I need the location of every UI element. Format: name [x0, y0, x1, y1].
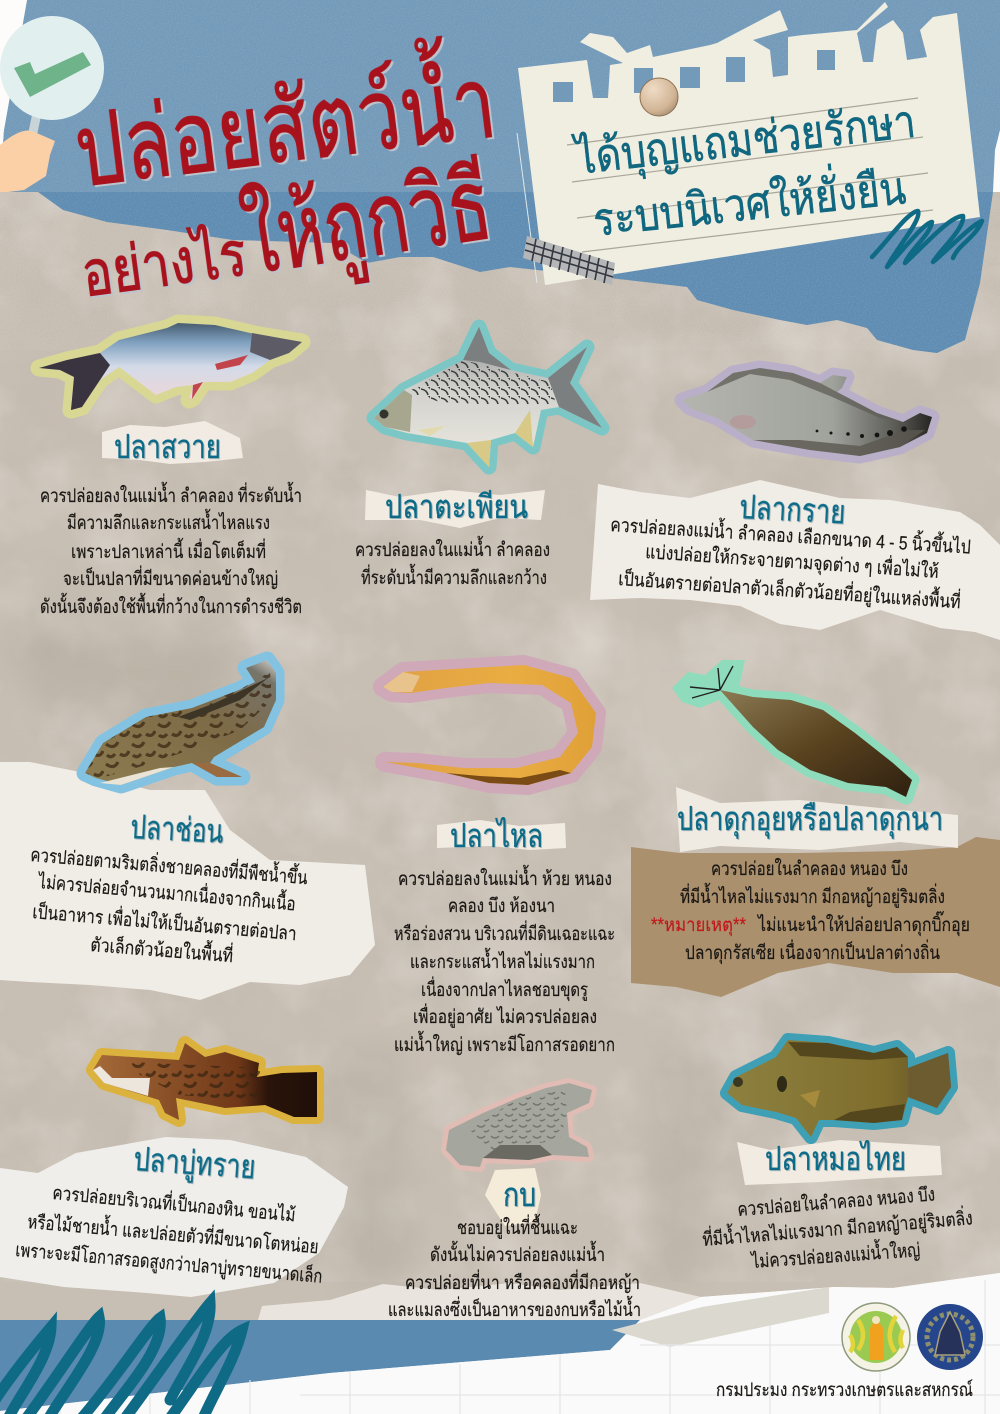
text: ปลาดุกอุย: ปลาดุกรัสเซีย เนื่องจากเป็นปลาต่างถิ่น	[685, 939, 940, 965]
sign with check mark	[0, 16, 104, 192]
fish: ปลาสวาย	[39, 323, 302, 410]
text: กบ	[388, 1214, 641, 1321]
fish: ปลากราย	[682, 368, 932, 456]
label: กบ	[485, 1168, 541, 1226]
text: ปลากราย: แบ่งปล่อยให้กระจายตามจุดต่าง ๆ เพื่อไม่ให้	[645, 538, 940, 584]
fish: ปลาดุกอุย	[672, 660, 912, 797]
panel: ปลาตะเพียน	[355, 327, 602, 589]
panel: ปลาสวาย	[39, 323, 302, 618]
panel: ปลากราย	[590, 368, 1000, 640]
text: ปลาช่อน: ไม่ควรปล่อยจำนวนมากเนื่องจากกินเนื้อ	[36, 868, 297, 915]
icon: pin	[640, 78, 678, 116]
text: ปลาบู่ทราย: หรือไม้ชายน้ำ และปล่อยตัวที่มีขนาดโตหน่อย	[27, 1208, 320, 1258]
text: กบ: ดังนั้นไม่ควรปล่อยลงแม่น้ำ	[430, 1241, 605, 1266]
note text	[570, 95, 918, 246]
icon: scribble	[872, 211, 982, 267]
text: ปลาสวาย	[40, 482, 302, 618]
note paper	[517, 2, 982, 285]
text: ปลาดุกอุย: **หมายเหตุ**	[651, 915, 747, 937]
label: กบ: กบ	[503, 1176, 536, 1213]
label: ปลากราย: ปลากราย	[739, 488, 846, 531]
panel: ปลาดุกอุย	[631, 660, 1000, 997]
text: ปลาไหล: เพื่ออยู่อาศัย ไม่ควรปล่อยลง	[413, 1003, 597, 1028]
panel: ปลาบู่ทราย	[0, 1043, 348, 1297]
text: ปลาสวาย: ดังนั้นจึงต้องใช้พื้นที่กว้างในการดำรงชีวิต	[40, 593, 302, 618]
fish: ปลาช่อน	[85, 660, 276, 785]
note text: ได้บุญแถมช่วยรักษา	[570, 95, 918, 187]
logo: department of fisheries	[842, 1303, 910, 1371]
text: ปลาหมอไทย: ไม่ควรปล่อยลงแม่น้ำใหญ่	[749, 1236, 921, 1273]
text: ปลาบู่ทราย: ควรปล่อยบริเวณที่เป็นกองหิน ขอนไม้	[52, 1179, 297, 1227]
text: ปลาสวาย: มีความลึกและกระแสน้ำไหลแรง	[67, 509, 270, 534]
fish: ปลาบู่ทราย	[93, 1043, 317, 1120]
text: ปลาสวาย: ควรปล่อยลงในแม่น้ำ ลำคลอง ที่ระดับน้ำ	[40, 482, 302, 507]
text: ปลาไหล	[394, 865, 615, 1056]
text: ปลาบู่ทราย: เพราะจะมีโอกาสรอดสูงกว่าปลาบู่ทรายขนาดเล็ก	[15, 1237, 323, 1288]
text: ปลาช่อน: ควรปล่อยตามริมตลิ่งชายคลองที่มีพืชน้ำขึ้น	[30, 841, 309, 889]
text: ปลาดุกอุย: ควรปล่อยในลำคลอง หนอง บึง	[711, 858, 908, 880]
label: ปลาช่อน: ปลาช่อน	[130, 808, 224, 850]
title	[67, 30, 502, 310]
fish: ปลาหมอไทย	[727, 1040, 951, 1137]
label: ปลาสวาย: ปลาสวาย	[114, 428, 221, 465]
text: ปลาหมอไทย	[701, 1184, 974, 1273]
text: ปลาไหล: เนื่องจากปลาไหลชอบขุดรู	[421, 976, 588, 1002]
panel: กบ	[388, 1083, 641, 1321]
label: ปลาไหล: ปลาไหล	[450, 817, 543, 854]
text: ปลาตะเพียน: ที่ระดับน้ำมีความลึกและกว้าง	[361, 564, 547, 589]
text: ปลาตะเพียน: ควรปล่อยลงในแม่น้ำ ลำคลอง	[355, 536, 550, 561]
text: กบ: ควรปล่อยที่นา หรือคลองที่มีกอหญ้า	[405, 1269, 640, 1294]
label: ปลาบู่ทราย: ปลาบู่ทราย	[132, 1140, 257, 1187]
fish: ปลาไหล	[383, 665, 596, 785]
label: ปลาหมอไทย	[737, 1140, 942, 1185]
title: ปล่อยสัตว์น้ำ	[67, 30, 502, 208]
text: ปลาไหล: หรือร่องสวน บริเวณที่มีดินเฉอะแฉะ	[394, 920, 615, 945]
logo: ministry of agriculture	[917, 1304, 983, 1370]
title: ให้ถูกวิธี	[235, 148, 499, 300]
text: ปลากราย	[610, 511, 972, 613]
text: ปลาช่อน	[30, 841, 309, 967]
panel: ปลาหมอไทย	[701, 1040, 974, 1273]
icon: hand holding sign	[0, 131, 55, 192]
label: ปลาตะเพียน: ปลาตะเพียน	[385, 488, 528, 525]
text: ปลาช่อน: ตัวเล็กตัวน้อยในพื้นที่	[90, 931, 234, 967]
text: ปลาตะเพียน	[355, 536, 550, 589]
panel: ปลาไหล	[383, 665, 615, 1056]
label: ปลาหมอไทย: ปลาหมอไทย	[765, 1140, 906, 1177]
text: กบ: และแมลงซึ่งเป็นอาหารของกบหรือไม้น้ำ	[388, 1296, 641, 1321]
fish: ปลาตะเพียน	[374, 327, 602, 467]
text: ปลาบู่ทราย	[15, 1179, 323, 1288]
text: ปลาช่อน: เป็นอาหาร เพื่อไม่ให้เป็นอันตรายต่อปลา	[32, 898, 298, 945]
text: ปลาไหล: คลอง บึง ห้องนา	[448, 896, 555, 917]
icon: grid tape	[523, 236, 615, 285]
text: ปลาไหล: แม่น้ำใหญ่ เพราะมีโอกาสรอดยาก	[394, 1031, 615, 1056]
text: ปลาสวาย: จะเป็นปลาที่มีขนาดค่อนข้างใหญ่	[63, 565, 278, 590]
text: ปลาดุกอุย	[651, 858, 970, 965]
title: อย่างไร	[78, 219, 250, 310]
footer: grid paper and blue band	[0, 1273, 1000, 1414]
panel: ปลาช่อน	[0, 660, 375, 1000]
text: ปลาหมอไทย: ควรปล่อยในลำคลอง หนอง บึง	[737, 1184, 936, 1221]
paper creases	[0, 620, 780, 1290]
frog	[446, 1083, 592, 1167]
text: ปลาดุกอุย: ที่มีน้ำไหลไม่แรงมาก มีกอหญ้าอยู่ริมตลิ่ง	[680, 883, 945, 908]
text: ปลาสวาย: เพราะปลาเหล่านี้ เมื่อโตเต็มที่	[71, 538, 266, 563]
text: ปลาไหล: ควรปล่อยลงในแม่น้ำ ห้วย หนอง	[398, 865, 612, 890]
text: กบ: ชอบอยู่ในที่ชื้นแฉะ	[457, 1214, 578, 1239]
icon: bottom scribble	[0, 1303, 242, 1414]
text: ปลาไหล: และกระแสน้ำไหลไม่แรงมาก	[410, 948, 595, 973]
note text: ระบบนิเวศให้ยั่งยืน	[590, 155, 908, 246]
